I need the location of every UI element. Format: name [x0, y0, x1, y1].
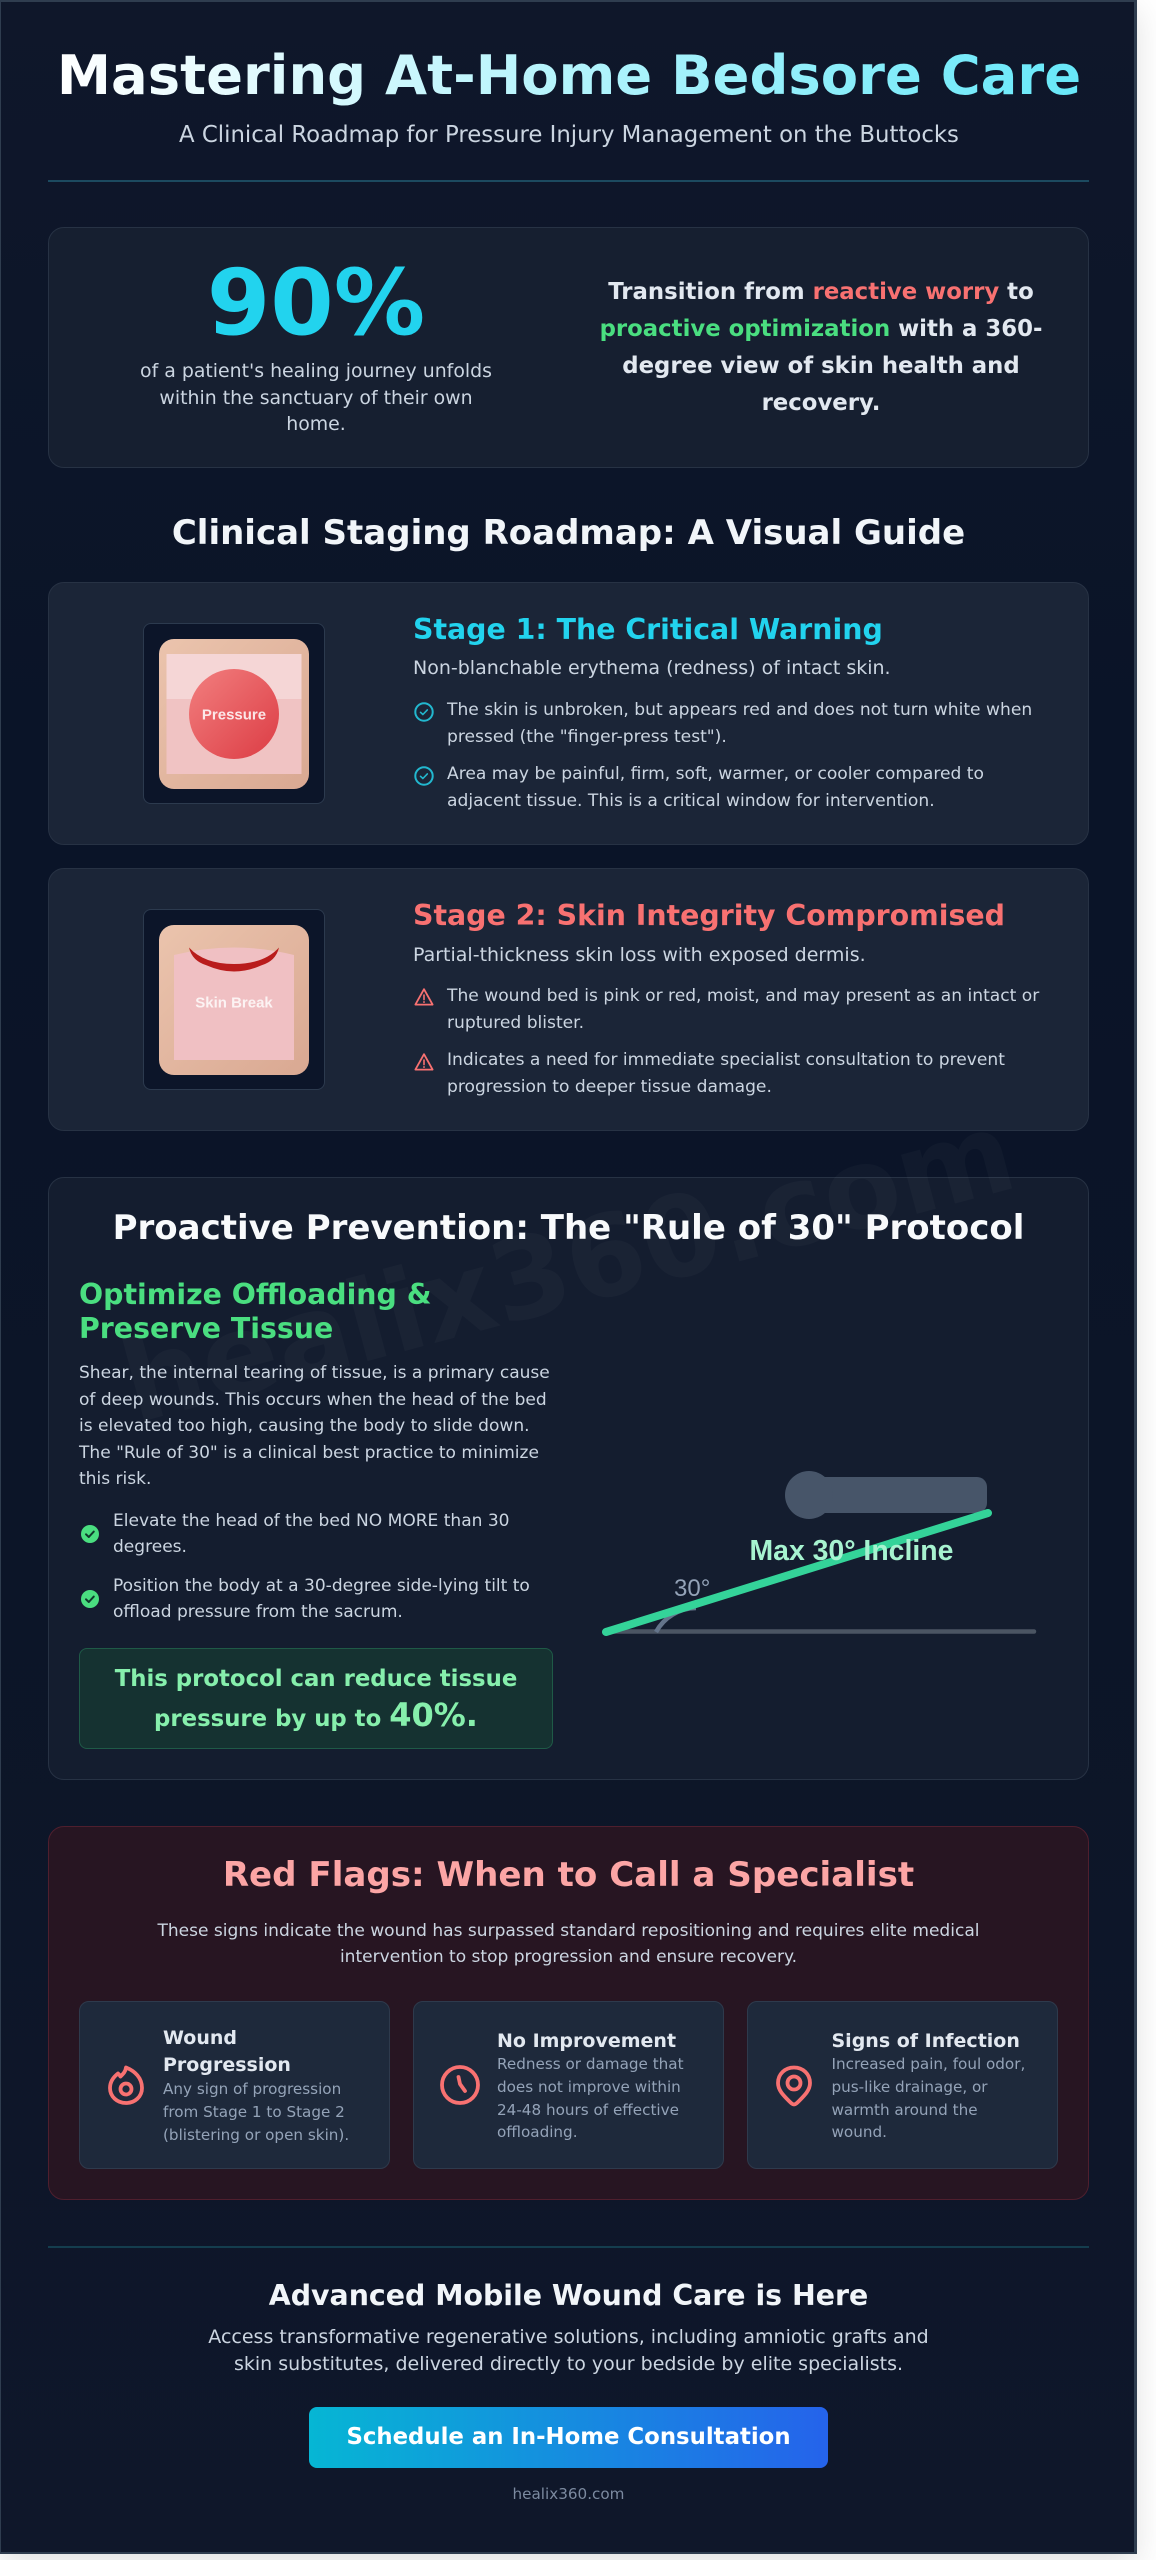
hero statement: proactive optimization with a 360- — [600, 316, 1042, 342]
card: no improvement: offloading. — [497, 2123, 578, 2141]
stage 1 bullet one: The skin is unbroken, but appears red and does not turn white when — [447, 700, 1032, 720]
card: signs of infection: Increased pain, foul odor, — [832, 2055, 1025, 2073]
prevention bullet two: offload pressure from the sacrum. — [113, 1602, 403, 1622]
prevention bullet one — [81, 1511, 510, 1557]
hero statement: recovery. — [762, 390, 880, 416]
prevention heading: Proactive Prevention: The "Rule of 30" Protocol — [113, 1208, 1024, 1248]
card: wound progression — [79, 2001, 390, 2169]
card: no improvement: No Improvement — [497, 2030, 676, 2052]
stage 2 illustration — [143, 909, 325, 1090]
heading: staging roadmap: Clinical Staging Roadmap: A Visual Guide — [172, 513, 965, 553]
card: no improvement: Redness or damage that — [497, 2055, 684, 2073]
footer text: Access transformative regenerative solutions, including amniotic grafts and — [208, 2326, 929, 2348]
stage 2 illustration: Skin Break — [195, 995, 273, 1012]
diagram: 30 degree incline: Max 30° Incline — [750, 1535, 953, 1567]
footer text — [208, 2326, 929, 2374]
panel: red flags — [48, 1826, 1089, 2200]
stage 2 bullet two: progression to deeper tissue damage. — [447, 1076, 772, 1096]
prevention paragraph: this risk. — [79, 1469, 151, 1489]
button: schedule consultation — [309, 2407, 828, 2468]
card: signs of infection: Signs of Infection — [832, 2030, 1020, 2052]
red flags description — [157, 1921, 980, 1967]
prevention bullet one: degrees. — [113, 1537, 187, 1557]
hero statement — [600, 279, 1042, 416]
prevention subheading: Preserve Tissue — [79, 1312, 333, 1345]
card: no improvement — [413, 2001, 724, 2169]
stage 2 bullet two — [414, 1050, 1005, 1096]
stage 1 bullet two — [414, 764, 984, 810]
panel: stage 1 — [48, 582, 1089, 845]
card: signs of infection — [747, 2001, 1058, 2169]
stage 1 bullet one: pressed (the "finger-press test"). — [447, 726, 727, 746]
stage 1 illustration: Pressure — [202, 706, 266, 723]
stage 2 title: Stage 2: Skin Integrity Compromised — [413, 899, 1005, 932]
watermark: healix360.com — [108, 1087, 1028, 1449]
prevention subheading: Optimize Offloading & — [79, 1277, 432, 1311]
card: wound progression: (blistering or open skin). — [163, 2126, 349, 2144]
red flags description: These signs indicate the wound has surpassed standard repositioning and requires elite medical — [157, 1921, 980, 1941]
stage 1 title: Stage 1: The Critical Warning — [413, 613, 883, 646]
prevention bullet two — [81, 1576, 530, 1622]
card: wound progression: from Stage 1 to Stage 2 — [163, 2103, 345, 2121]
footer divider — [48, 2246, 1089, 2248]
card: signs of infection: warmth around the — [832, 2101, 978, 2119]
callout: 40 percent: pressure by up to 40%. — [154, 1696, 478, 1734]
stat caption: of a patient's healing journey unfolds — [140, 360, 492, 382]
prevention bullet one: Elevate the head of the bed NO MORE than 30 — [113, 1511, 510, 1531]
card: wound progression: Any sign of progression — [163, 2080, 341, 2098]
stage 2 bullet two: Indicates a need for immediate specialist consultation to prevent — [447, 1050, 1005, 1070]
prevention paragraph: is elevated too high, causing the body to slide down. — [79, 1416, 530, 1436]
callout: 40 percent: This protocol can reduce tissue — [115, 1666, 517, 1692]
stage 1 bullet two: adjacent tissue. This is a critical window for intervention. — [447, 790, 935, 810]
card: signs of infection: pus-like drainage, or — [832, 2078, 988, 2096]
stat caption: home. — [286, 413, 346, 435]
footer heading: Advanced Mobile Wound Care is Here — [269, 2279, 868, 2312]
panel: prevention protocol — [48, 1177, 1089, 1780]
icon: map pin — [776, 2066, 812, 2106]
prevention paragraph: of deep wounds. This occurs when the head of the bed — [79, 1390, 547, 1410]
button: schedule consultation: Schedule an In-Home Consultation — [346, 2424, 791, 2450]
card: no improvement: does not improve within — [497, 2078, 681, 2096]
card: wound progression: Wound — [163, 2027, 237, 2049]
panel: stage 2 — [48, 868, 1089, 1131]
stage 1 description: Non-blanchable erythema (redness) of intact skin. — [413, 657, 891, 679]
panel: hero statistic — [48, 227, 1089, 468]
card: no improvement: 24-48 hours of effective — [497, 2101, 679, 2119]
diagram: 30 degree incline: 30° — [674, 1575, 710, 1602]
prevention paragraph: Shear, the internal tearing of tissue, is a primary cause — [79, 1363, 550, 1383]
stage 2 description: Partial-thickness skin loss with exposed dermis. — [413, 944, 866, 966]
callout: 40 percent — [79, 1648, 553, 1749]
prevention bullet two: Position the body at a 30-degree side-lying tilt to — [113, 1576, 530, 1596]
stage 2 bullet one: ruptured blister. — [447, 1012, 584, 1032]
header divider — [48, 180, 1089, 182]
stage 2 bullet one: The wound bed is pink or red, moist, and may present as an intact or — [447, 986, 1039, 1006]
prevention paragraph — [78, 1363, 550, 1489]
hero statement: Transition from reactive worry to — [608, 279, 1034, 305]
footer url: healix360.com — [513, 2485, 624, 2503]
icon: flame — [108, 2066, 144, 2105]
card: wound progression: Progression — [163, 2054, 291, 2076]
stage 1 bullet one — [414, 700, 1032, 746]
red flags description: intervention to stop progression and ensure recovery. — [340, 1947, 797, 1967]
card: signs of infection: wound. — [832, 2123, 887, 2141]
stage 1 illustration — [143, 623, 325, 804]
stage 1 bullet two: Area may be painful, firm, soft, warmer, or cooler compared to — [447, 764, 984, 784]
diagram: 30 degree incline — [602, 1471, 1036, 1636]
stat: 90 percent: 90% — [207, 249, 425, 356]
stat caption — [140, 360, 492, 435]
stat caption: within the sanctuary of their own — [159, 386, 473, 408]
icon: clock — [440, 2065, 480, 2105]
subtitle: A Clinical Roadmap for Pressure Injury Management on the Buttocks — [179, 122, 959, 148]
red flags heading: Red Flags: When to Call a Specialist — [223, 1855, 914, 1895]
title: Mastering At-Home Bedsore Care — [57, 44, 1081, 107]
footer text: skin substitutes, delivered directly to your bedside by elite specialists. — [234, 2352, 903, 2374]
hero statement: degree view of skin health and — [622, 353, 1020, 379]
stage 2 bullet one — [414, 986, 1040, 1032]
prevention subheading — [79, 1277, 432, 1345]
prevention paragraph: The "Rule of 30" is a clinical best practice to minimize — [79, 1443, 539, 1463]
